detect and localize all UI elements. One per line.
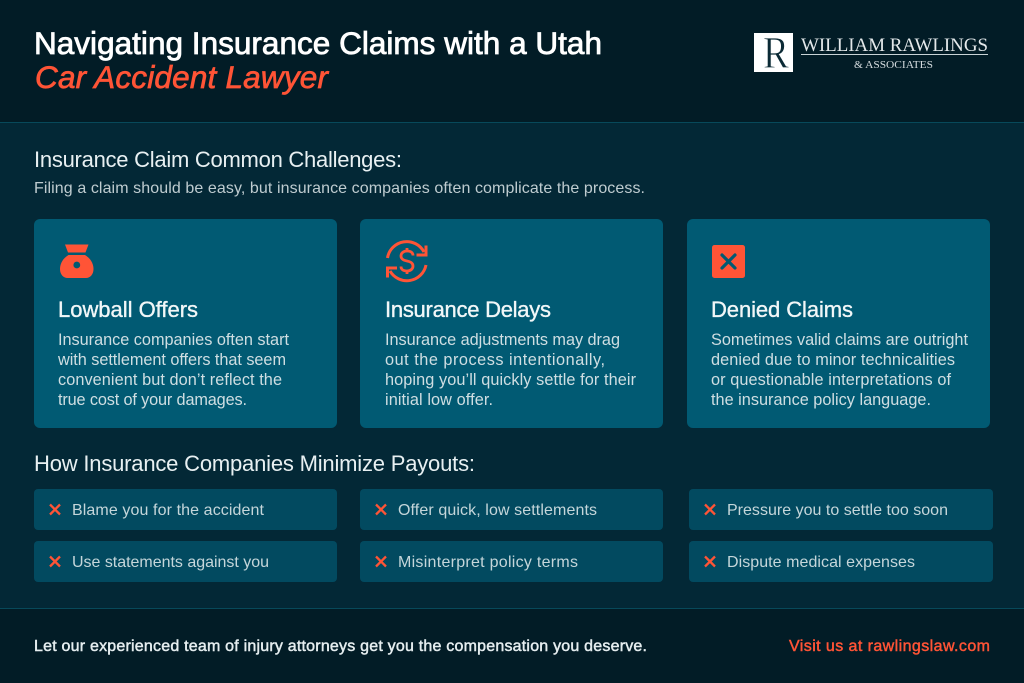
card title: Denied Claims bbox=[711, 297, 853, 322]
card body bbox=[385, 331, 637, 409]
title: Navigating Insurance Claims with a Utah bbox=[34, 25, 602, 61]
panel: insurance delays bbox=[360, 219, 663, 428]
card body: the insurance policy language. bbox=[711, 391, 931, 409]
list item: pressure: Pressure you to settle too soon bbox=[727, 502, 948, 519]
logo: William Rawlings & Associates bbox=[754, 27, 988, 78]
card body: true cost of your damages. bbox=[58, 391, 247, 409]
card body: denied due to minor technicalities bbox=[711, 351, 955, 369]
card body: Insurance adjustments may drag bbox=[385, 331, 620, 349]
card body: hoping you’ll quickly settle for their bbox=[385, 371, 637, 389]
list item: quick settlements bbox=[360, 489, 663, 530]
list item: blame bbox=[34, 489, 337, 530]
list item: policy terms bbox=[360, 541, 663, 582]
list item: blame: Blame you for the accident bbox=[72, 502, 265, 519]
card title: Insurance Delays bbox=[385, 297, 551, 322]
card body: Sometimes valid claims are outright bbox=[711, 331, 968, 349]
intro text: Filing a claim should be easy, but insurance companies often complicate the process. bbox=[34, 180, 645, 197]
card body: or questionable interpretations of bbox=[711, 371, 951, 389]
card body: with settlement offers that seem bbox=[57, 351, 286, 369]
list item: pressure bbox=[689, 489, 993, 530]
title: Car Accident Lawyer bbox=[35, 59, 330, 95]
icon: money bag bbox=[60, 244, 94, 278]
footer message: Let our experienced team of injury attorneys get you the compensation you deserve. bbox=[34, 638, 647, 655]
logo: William Rawlings & Associates: R bbox=[763, 27, 789, 78]
card body: initial low offer. bbox=[385, 391, 493, 409]
footer band bbox=[0, 608, 1024, 683]
title bbox=[34, 25, 602, 95]
logo: William Rawlings & Associates: & ASSOCIATES bbox=[854, 59, 933, 71]
list item: statements bbox=[34, 541, 337, 582]
list item: medical expenses: Dispute medical expenses bbox=[727, 554, 915, 571]
card body: Insurance companies often start bbox=[58, 331, 289, 349]
card body: convenient but don’t reflect the bbox=[58, 371, 282, 389]
icon: dollar with circular arrows bbox=[388, 242, 426, 281]
panel: lowball offers bbox=[34, 219, 337, 428]
card body bbox=[57, 331, 289, 409]
heading: minimize payouts: How Insurance Companies Minimize Payouts: bbox=[34, 451, 475, 476]
header band bbox=[0, 0, 1024, 123]
list item: medical expenses bbox=[689, 541, 993, 582]
list item: statements: Use statements against you bbox=[72, 554, 269, 571]
card body: out the process intentionally, bbox=[385, 351, 605, 369]
list item: policy terms: Misinterpret policy terms bbox=[398, 554, 578, 571]
footer link: Visit us at rawlingslaw.com bbox=[789, 638, 990, 655]
card body bbox=[711, 331, 968, 409]
card title: Lowball Offers bbox=[58, 297, 198, 322]
logo: William Rawlings & Associates: WILLIAM RAWLINGS bbox=[801, 35, 988, 56]
panel: denied claims bbox=[687, 219, 990, 428]
heading: common challenges: Insurance Claim Common Challenges: bbox=[34, 147, 402, 172]
icon: x in square bbox=[712, 245, 745, 278]
list item: quick settlements: Offer quick, low settlements bbox=[398, 502, 597, 519]
